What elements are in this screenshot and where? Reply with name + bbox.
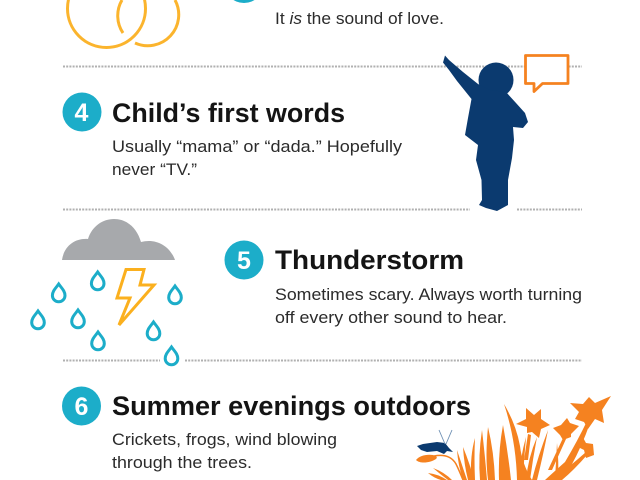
icon: rain cloud	[62, 219, 175, 260]
icon: orange grass and flowers	[428, 396, 611, 480]
number badge 3	[224, 0, 264, 3]
flower 3	[570, 396, 611, 429]
description: first words line 1: Usually “mama” or “dada.” Hopefully	[112, 138, 403, 156]
icon: wedding rings	[68, 0, 179, 48]
item 5	[224, 240, 582, 327]
heading: summer evenings outdoors: Summer evenings outdoors	[112, 391, 471, 421]
item 3 text: It is the sound of love.	[275, 10, 444, 28]
number badge 6	[62, 386, 101, 426]
flower 4	[578, 434, 594, 458]
icon: raindrops	[32, 272, 181, 365]
description: thunderstorm line 2: off every other sound to hear.	[275, 309, 507, 327]
heading: thunderstorm: Thunderstorm	[275, 245, 464, 275]
description: summer evenings line 1: Crickets, frogs, wind blowing	[112, 431, 337, 449]
icon: cricket on leaf	[416, 430, 463, 480]
number badge 5: 5	[237, 247, 251, 275]
item 4	[62, 92, 403, 179]
description: first words line 2: never “TV.”	[112, 161, 197, 179]
icon: lightning bolt	[117, 270, 154, 325]
item 6	[62, 386, 471, 472]
heading: child's first words: Child’s first words	[112, 98, 345, 128]
number badge 6: 6	[75, 393, 88, 421]
number badge 5	[224, 240, 264, 280]
number badge 4: 4	[75, 99, 89, 127]
icon: speech bubble	[526, 56, 568, 92]
number badge 4	[62, 92, 102, 132]
description: summer evenings line 2: through the trees.	[112, 454, 252, 472]
icon: child silhouette pointing	[443, 56, 528, 211]
description: thunderstorm line 1: Sometimes scary. Always worth turning	[275, 286, 582, 304]
flower 2	[553, 418, 579, 440]
flower 1	[516, 408, 550, 438]
